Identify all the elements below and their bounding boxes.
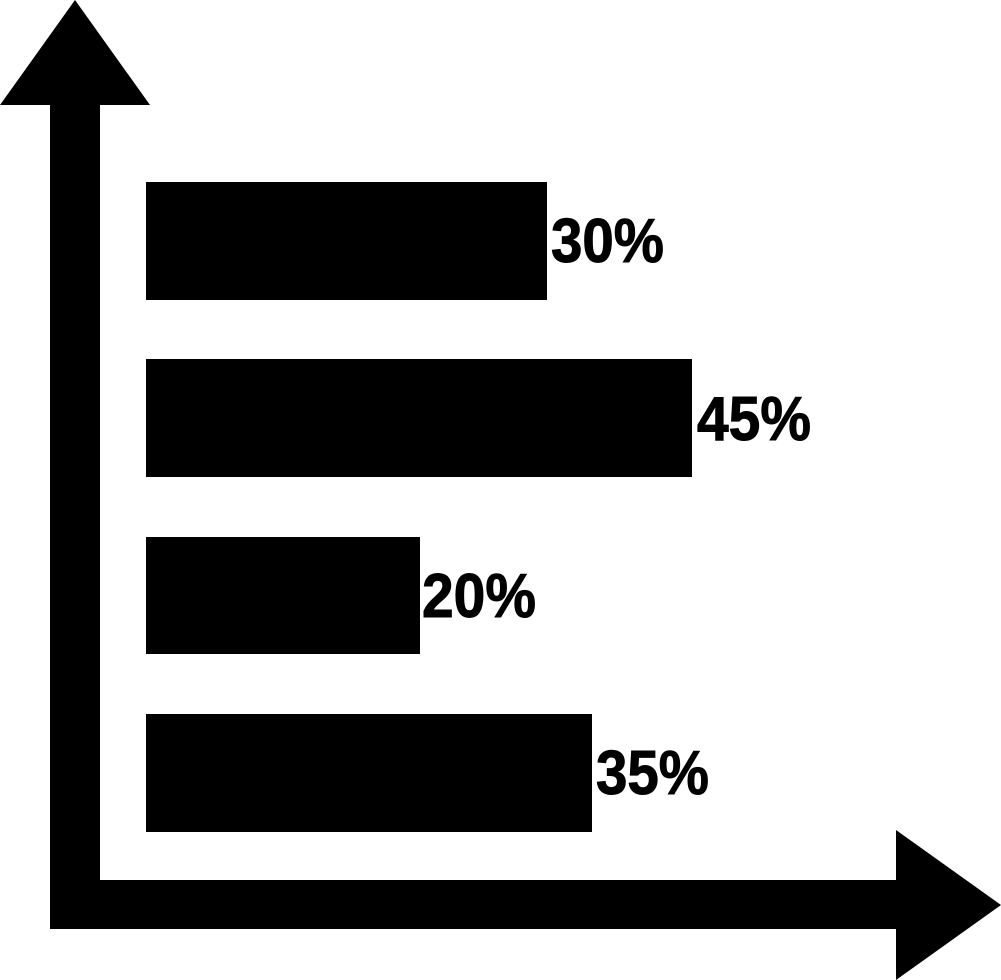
bar row: 45%: 45% (697, 385, 811, 454)
bar row: 35% (146, 714, 709, 832)
bar row: 35%: 35% (596, 739, 709, 808)
bar row: 20% (146, 537, 536, 654)
x axis arrow (50, 830, 1001, 980)
bar row: 30%: 30% (551, 207, 664, 276)
bar row: 30% (146, 182, 664, 300)
bar row: 20%: 20% (422, 562, 536, 631)
bar row: 45% (146, 359, 811, 477)
y axis arrow (0, 0, 150, 880)
